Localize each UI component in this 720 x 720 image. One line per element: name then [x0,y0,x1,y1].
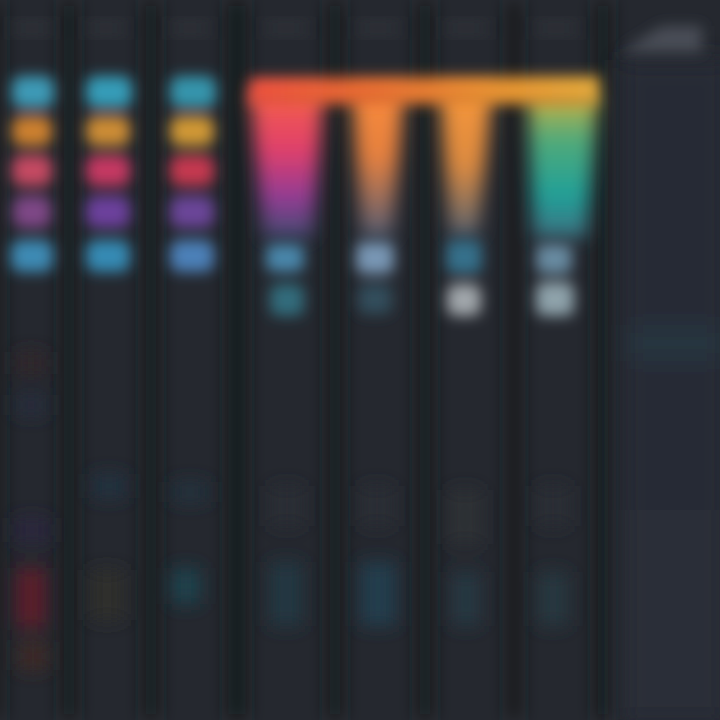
gradient column 2 [352,90,404,238]
header row labels [12,22,578,34]
lower faint rows [14,352,568,670]
panel: right side column [620,60,720,720]
gradient column 3 [440,90,492,238]
gradient column 4 [528,95,598,238]
column 1 swatches [11,76,54,272]
column 3 swatches [170,76,216,272]
column 2 swatches [86,76,132,272]
lower swatches, gradient columns [266,240,574,316]
top gradient bar [250,76,600,104]
gradient column 1 [250,90,324,238]
header: right badge [620,26,702,52]
